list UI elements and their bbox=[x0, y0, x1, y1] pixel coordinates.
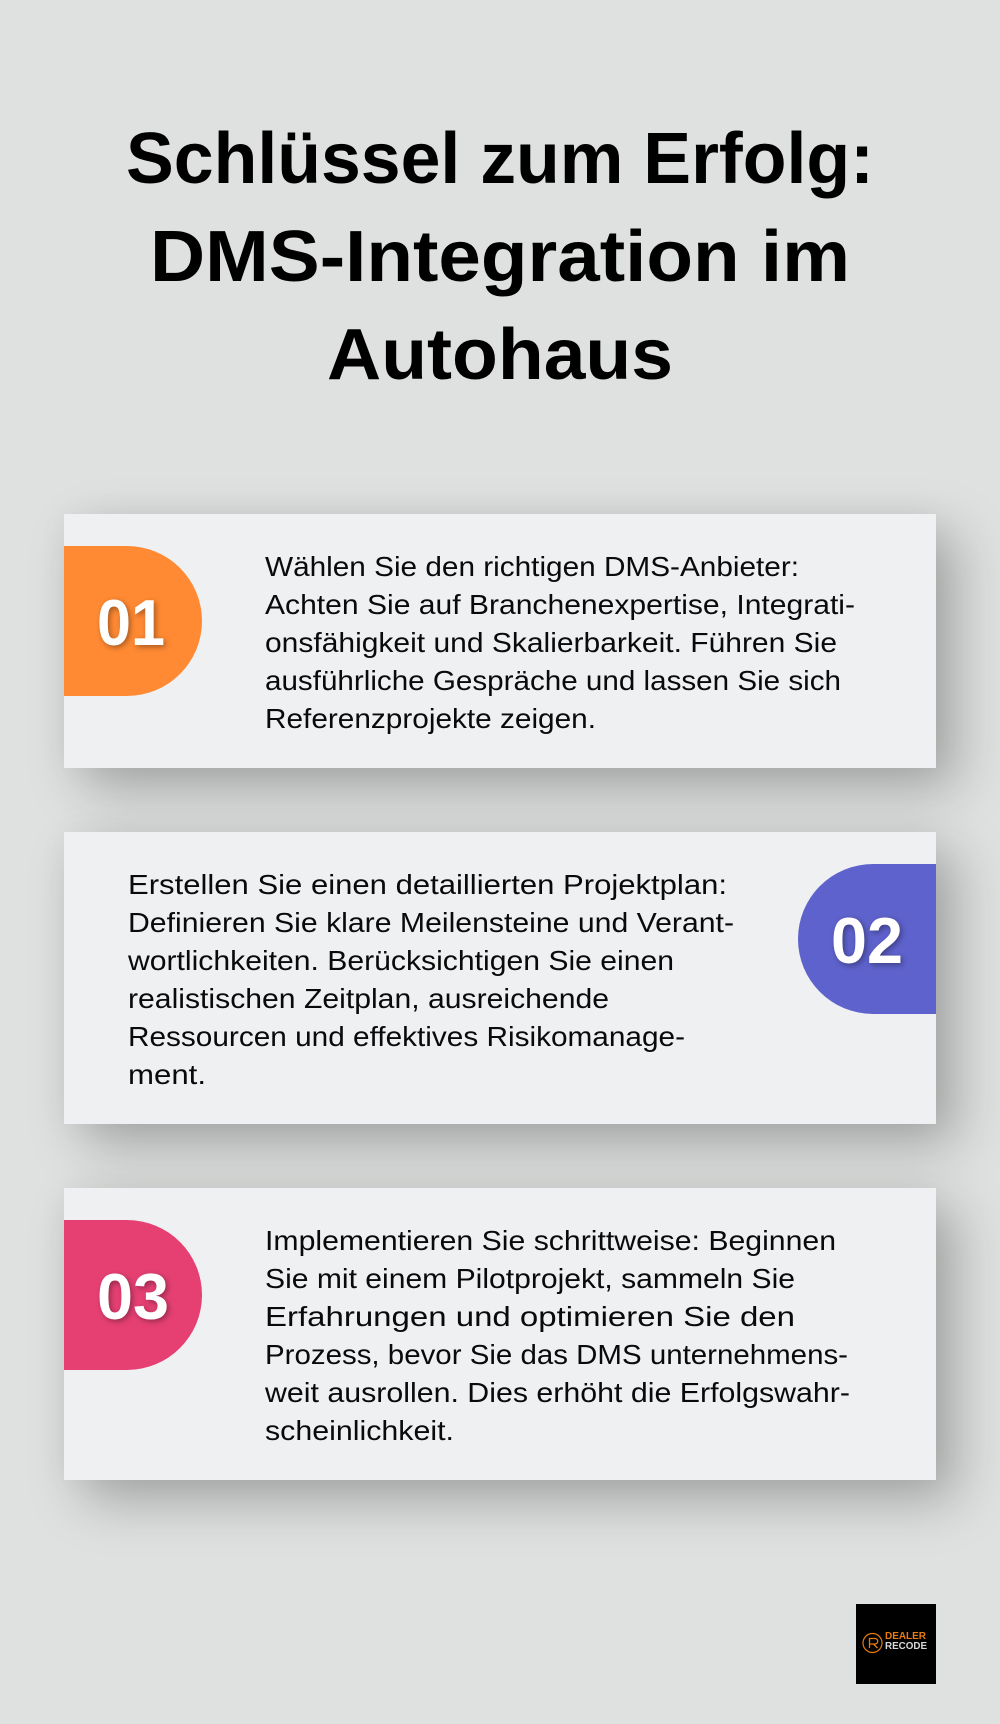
text: step 03 description: Implementieren Sie schrittweise: Beginnen bbox=[265, 1225, 836, 1256]
badge: 01: 01 bbox=[97, 586, 165, 659]
title: Autohaus bbox=[327, 315, 673, 395]
text: step 02 description: wortlichkeiten. Berücksichtigen Sie einen bbox=[127, 945, 674, 976]
title: DMS-Integration im bbox=[150, 217, 850, 297]
text: step 02 description: realistischen Zeitplan, ausreichende bbox=[128, 983, 609, 1014]
text: step 02 description: Definieren Sie klare Meilensteine und Verant- bbox=[128, 907, 734, 938]
panel: step 01 bbox=[64, 514, 936, 768]
text: step 01 description: Wählen Sie den richtigen DMS-Anbieter: bbox=[265, 551, 799, 582]
title bbox=[126, 119, 874, 395]
text: step 03 description: scheinlichkeit. bbox=[265, 1415, 454, 1446]
badge: 02 bbox=[798, 864, 936, 1014]
title: Schlüssel zum Erfolg: bbox=[126, 119, 874, 199]
text: step 02 description bbox=[127, 869, 734, 1090]
panel: step 03 bbox=[64, 1188, 936, 1480]
logo: Dealer Recode: RECODE bbox=[885, 1640, 927, 1652]
badge: 03 bbox=[64, 1220, 202, 1370]
text: step 03 description bbox=[264, 1225, 850, 1446]
panel: step 02 bbox=[64, 832, 936, 1124]
text: step 01 description: onsfähigkeit und Skalierbarkeit. Führen Sie bbox=[265, 627, 837, 658]
logo: Dealer Recode bbox=[856, 1604, 936, 1684]
logo: Dealer Recode: DEALER bbox=[885, 1630, 926, 1642]
text: step 02 description: Ressourcen und effektives Risikomanage- bbox=[128, 1021, 685, 1052]
text: step 03 description: Prozess, bevor Sie das DMS unternehmens- bbox=[265, 1339, 848, 1370]
badge: 02: 02 bbox=[831, 904, 903, 977]
text: step 03 description: Erfahrungen und optimieren Sie den bbox=[265, 1301, 795, 1332]
badge: 03: 03 bbox=[97, 1260, 169, 1333]
text: step 03 description: Sie mit einem Pilotprojekt, sammeln Sie bbox=[265, 1263, 795, 1294]
text: step 02 description: Erstellen Sie einen detaillierten Projektplan: bbox=[128, 869, 727, 900]
text: step 03 description: weit ausrollen. Dies erhöht die Erfolgswahr- bbox=[264, 1377, 850, 1408]
text: step 01 description: ausführliche Gespräche und lassen Sie sich bbox=[265, 665, 841, 696]
text: step 01 description bbox=[265, 551, 855, 734]
badge: 01 bbox=[64, 546, 202, 696]
text: step 01 description: Achten Sie auf Branchenexpertise, Integrati- bbox=[265, 589, 855, 620]
text: step 01 description: Referenzprojekte zeigen. bbox=[265, 703, 596, 734]
text: step 02 description: ment. bbox=[128, 1059, 206, 1090]
